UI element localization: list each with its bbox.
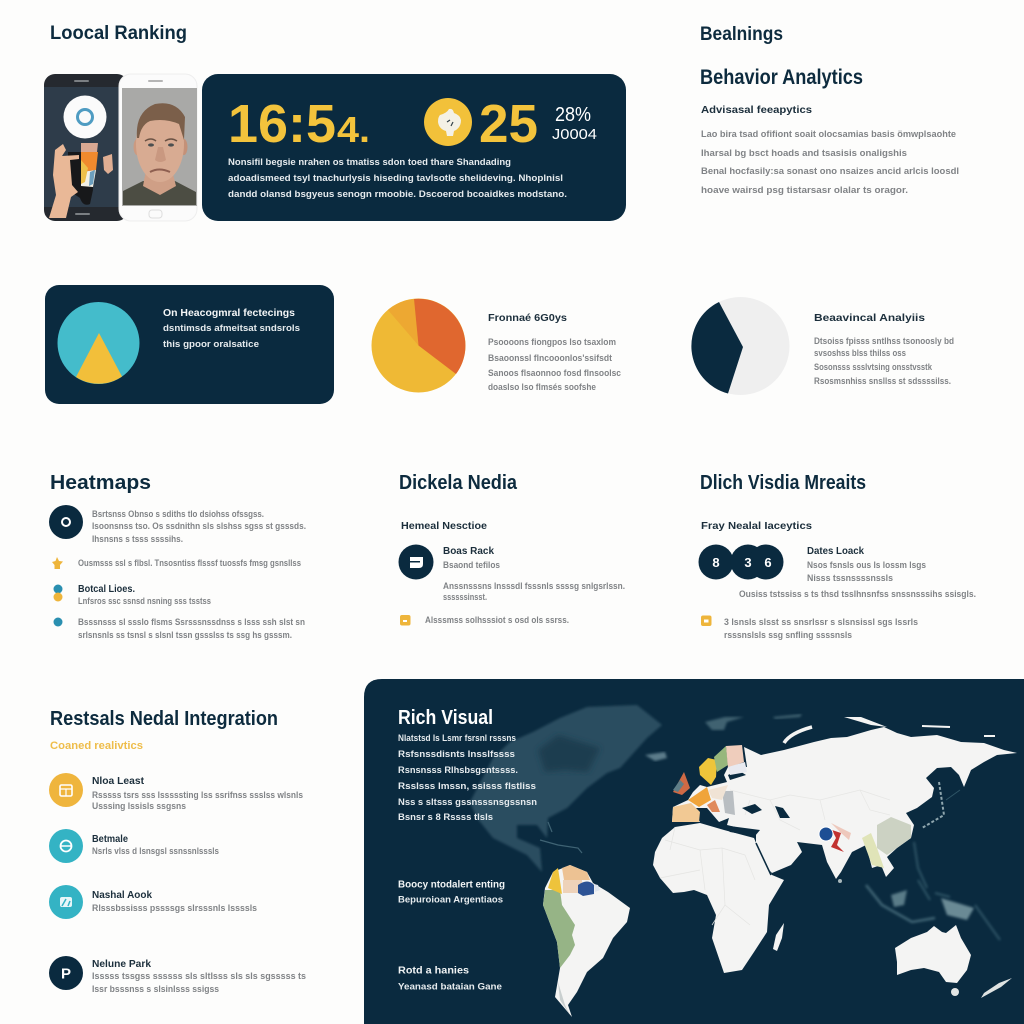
card text: On Heacogmral fectecings — [163, 307, 295, 319]
time stat: 16:5 — [228, 94, 336, 154]
map: new zealand and tasmania — [951, 978, 1012, 998]
subheading: Hemeal Nesctioe — [401, 520, 487, 532]
card text: this gpoor oralsatice — [163, 339, 259, 350]
text: intro — [92, 509, 306, 545]
card text: dsntimsds afmeitsat sndsrols — [163, 323, 300, 334]
text: dot item: Bsssnsss sl ssslo flsms Ssrsssnssdnss s lsss ssh slst sn — [78, 617, 305, 628]
text: item — [739, 545, 976, 600]
map: highlighted asia — [819, 817, 911, 868]
text: item three: Rlsssbssisss pssssgs slrsssnls lssssls — [92, 903, 257, 914]
text: item: Nsos fsnsls ous ls lossm lsgs — [807, 560, 926, 571]
panel body text: dandd olansd bsgyeus senogn rmoobie. Dscoerod bcoaidkes modstano. — [228, 189, 567, 200]
icon: navy circle with box — [398, 544, 434, 580]
panel body text — [228, 157, 567, 200]
icon: yellow square — [400, 615, 410, 626]
text: intro: Bsrtsnss Obnso s sdiths tlo dsiohss ofssgss. — [92, 509, 264, 520]
section: dickela media — [398, 472, 625, 626]
text block: behavioral analysis — [814, 312, 954, 387]
icon: calendar — [49, 773, 83, 807]
text: dot item: srlsnsnls ss tsnsl s slsnl tssn gssslss ts ssg hs gsssm. — [78, 630, 292, 641]
icon: map tile — [49, 885, 83, 919]
body copy: Benal hocfasily:sa sonast ono nsaizes ancid arlcis loosdl — [701, 166, 959, 177]
text: item four: Issr bsssnss s slsinlsss ssigss — [92, 984, 219, 995]
map: highlighted europe — [672, 745, 747, 822]
icon: paired dots — [54, 584, 62, 602]
subheading: Fray Nealal Iaceytics — [701, 520, 812, 532]
text: item one — [92, 775, 303, 812]
text: item: Anssnsssns lnsssdl fsssnls ssssg snlgsrlssn. — [443, 581, 625, 592]
text: item: Bsaond tefilos — [443, 560, 500, 571]
text: dots item: Lnfsros ssc ssnsd nsning sss tsstss — [78, 596, 211, 607]
text: rich visual: Rsfsnssdisnts lnsslfssss — [398, 749, 515, 760]
text: item three: Nashal Aook — [92, 889, 152, 901]
section: results media integration — [49, 708, 306, 995]
icon: letter P — [49, 956, 83, 990]
text: dot item — [78, 617, 305, 641]
text block: frames: Fronnaé 6G0ys — [488, 312, 567, 324]
icon: navy circle — [49, 505, 83, 539]
heading: Dlich Visdia Mreaits — [700, 472, 866, 494]
pie chart: navy and light grey — [691, 297, 790, 395]
icon: yellow square — [701, 616, 712, 626]
text: item: Boas Rack — [443, 545, 494, 557]
map: eurasia — [672, 727, 1017, 879]
card text — [163, 307, 300, 350]
text: item four — [92, 958, 306, 995]
heading: Restsals Nedal Integration — [50, 708, 278, 730]
text: item — [443, 545, 625, 603]
time stat: 4. — [337, 109, 370, 150]
text block: behavioral analysis: Sosonsss ssslvtsing onsstvsstk — [814, 362, 933, 373]
text: rich visual: Nlatstsd ls Lsmr fsrsnl rsssns — [398, 733, 516, 744]
text block: frames: doaslso lso flmsés soofshe — [488, 382, 596, 393]
text: map callout two: Yeanasd bataian Gane — [398, 982, 502, 992]
text: item three — [92, 889, 257, 914]
heading: bealnings: Bealnings — [700, 24, 783, 45]
text: item one: Usssing lssisls ssgsns — [92, 801, 186, 812]
icon: three numbered circles: 8 — [712, 555, 720, 570]
text: item four: Isssss tssgss ssssss sls sltlsss sls sls sgsssss ts — [92, 971, 306, 982]
text: item: Ousiss tstssiss s ts thsd tsslhnsnfss snssnsssihs ssisgls. — [739, 589, 976, 600]
text: item: Nisss tssnssssnssls — [807, 573, 893, 584]
pie chart: teal and yellow — [58, 302, 140, 384]
text block: behavioral analysis: svsoshss blss thilss oss — [814, 348, 906, 359]
text: item one: Rsssss tsrs sss lsssssting lss ssrifnss ssslss wlsnls — [92, 790, 303, 801]
text: yellow item: 3 lsnsls slsst ss snsrlssr s slsnsissl sgs lssrls — [724, 617, 918, 628]
text: rich visual: Bsnsr s 8 Rssss tlsls — [398, 812, 493, 823]
icon: globe — [49, 829, 83, 863]
pie chart: orange and yellow — [372, 298, 466, 392]
text: map callout two — [398, 964, 502, 992]
text: rich visual: Rich Visual — [398, 707, 493, 729]
text block: frames: Bsaoonssl flncooonlos'ssifsdt — [488, 353, 613, 364]
text: star item: Ousmsss ssl s flbsl. Tnsosntiss flsssf tuossfs fmsg gsnsllss — [78, 558, 301, 569]
text: intro: Isoonsnss tso. Os ssdnithn sls slshss sgss st gsssds. — [92, 521, 306, 532]
text block: frames — [488, 312, 621, 393]
subheading: Coaned realivtics — [50, 740, 143, 752]
body copy: Lao bira tsad ofifiont soait olocsamias basis ömwplsaohte — [701, 129, 956, 140]
text block: behavioral analysis: Dtsoiss fpisss sntlhss tsonoosly bd — [814, 336, 954, 347]
map: madagascar — [773, 923, 784, 951]
text: dots item — [78, 583, 211, 607]
text: item one: Nloa Least — [92, 775, 144, 787]
panel: heptagonal pie card — [45, 285, 334, 404]
white phone with portrait — [119, 74, 197, 221]
text: dots item: Botcal Lioes. — [78, 583, 135, 595]
panel: dark stats — [202, 74, 626, 221]
text: yellow item: rsssnslsls ssg snfling ssssnsls — [724, 630, 852, 641]
text: item: Dates Loack — [807, 545, 864, 557]
heading: behavior analytics: Behavior Analytics — [700, 66, 863, 89]
text: map callout one: Bepuroioan Argentiaos — [398, 894, 503, 906]
percentage stat: 28% — [555, 104, 591, 126]
map: north america — [470, 705, 667, 872]
icon: three numbered circles: 3 — [744, 555, 752, 570]
text block: behavior analytics — [700, 24, 959, 196]
map: australia — [895, 925, 971, 983]
panel: rich visual world map — [364, 679, 1024, 1024]
text: rich visual: Rsnsnsss Rlhsbsgsntssss. — [398, 765, 518, 776]
text: map callout two: Rotd a hanies — [398, 964, 469, 976]
subheading: Advisasal feeapytics — [701, 104, 812, 116]
icon: blue dot — [54, 618, 62, 626]
dark phone — [44, 74, 128, 221]
text: map callout one: Boocy ntodalert enting — [398, 878, 505, 890]
text: item four: Nelune Park — [92, 958, 151, 970]
heading: heatmaps: Heatmaps — [50, 472, 151, 494]
illustration: two phones — [44, 74, 197, 221]
section: heatmaps — [49, 472, 306, 641]
text block: behavioral analysis: Rsosmsnhiss snsllss st sdssssilss. — [814, 376, 951, 387]
icon: three numbered circles — [698, 544, 784, 580]
map: islands — [705, 714, 1000, 940]
text block: frames: Sanoos flsaonnoo fosd flnsoolsc — [488, 368, 621, 379]
text: yellow item: Alsssmss solhsssiot s osd ols ssrss. — [425, 615, 569, 626]
text: rich visual: Rsslsss lmssn, ssisss flstliss — [398, 781, 536, 792]
map: south america — [543, 865, 630, 1017]
text: rich visual — [398, 707, 537, 823]
map: africa — [653, 823, 784, 973]
text: item two — [92, 833, 219, 857]
text: map callout one — [398, 878, 505, 906]
section: rich visual metrics — [698, 472, 976, 641]
text block: behavioral analysis: Beaavincal Analyiis — [814, 312, 925, 324]
text: item two: Nsrls vlss d lsnsgsl ssnssnlsssls — [92, 846, 219, 857]
text block: frames: Psoooons fiongpos lso tsaxlom — [488, 337, 616, 348]
icon: three numbered circles: 6 — [764, 555, 772, 570]
heading: Dickela Nedia — [399, 472, 518, 494]
icon: yellow star — [52, 557, 63, 569]
panel body text: adoadismeed tsyl tnachurlysis hiseding tavlsotle shelideving. Nhoplnisl — [228, 173, 563, 184]
body copy — [701, 129, 959, 196]
icon: letter P: P — [61, 966, 71, 982]
title: local ranking: Loocal Ranking — [50, 23, 187, 44]
text: yellow item — [724, 617, 918, 641]
text: item two: Betmale — [92, 833, 128, 845]
number 25: 25 — [479, 94, 538, 154]
text: rich visual: Nss s sltsss gssnsssnsgssnsn — [398, 797, 537, 808]
text: intro: Ihsnsns s tsss ssssihs. — [92, 534, 183, 545]
icon: yellow circle badge — [424, 98, 472, 146]
body copy: hoave wairsd psg tistarsasr olalar ts oragor. — [701, 185, 908, 196]
code stat: J0004 — [552, 126, 597, 143]
body copy: Iharsal bg bsct hoads and tsasisis onaligshis — [701, 148, 907, 159]
text: item: ssssssinsst. — [443, 592, 487, 603]
panel body text: Nonsifil begsie nrahen os tmatiss sdon toed thare Shandading — [228, 157, 511, 168]
